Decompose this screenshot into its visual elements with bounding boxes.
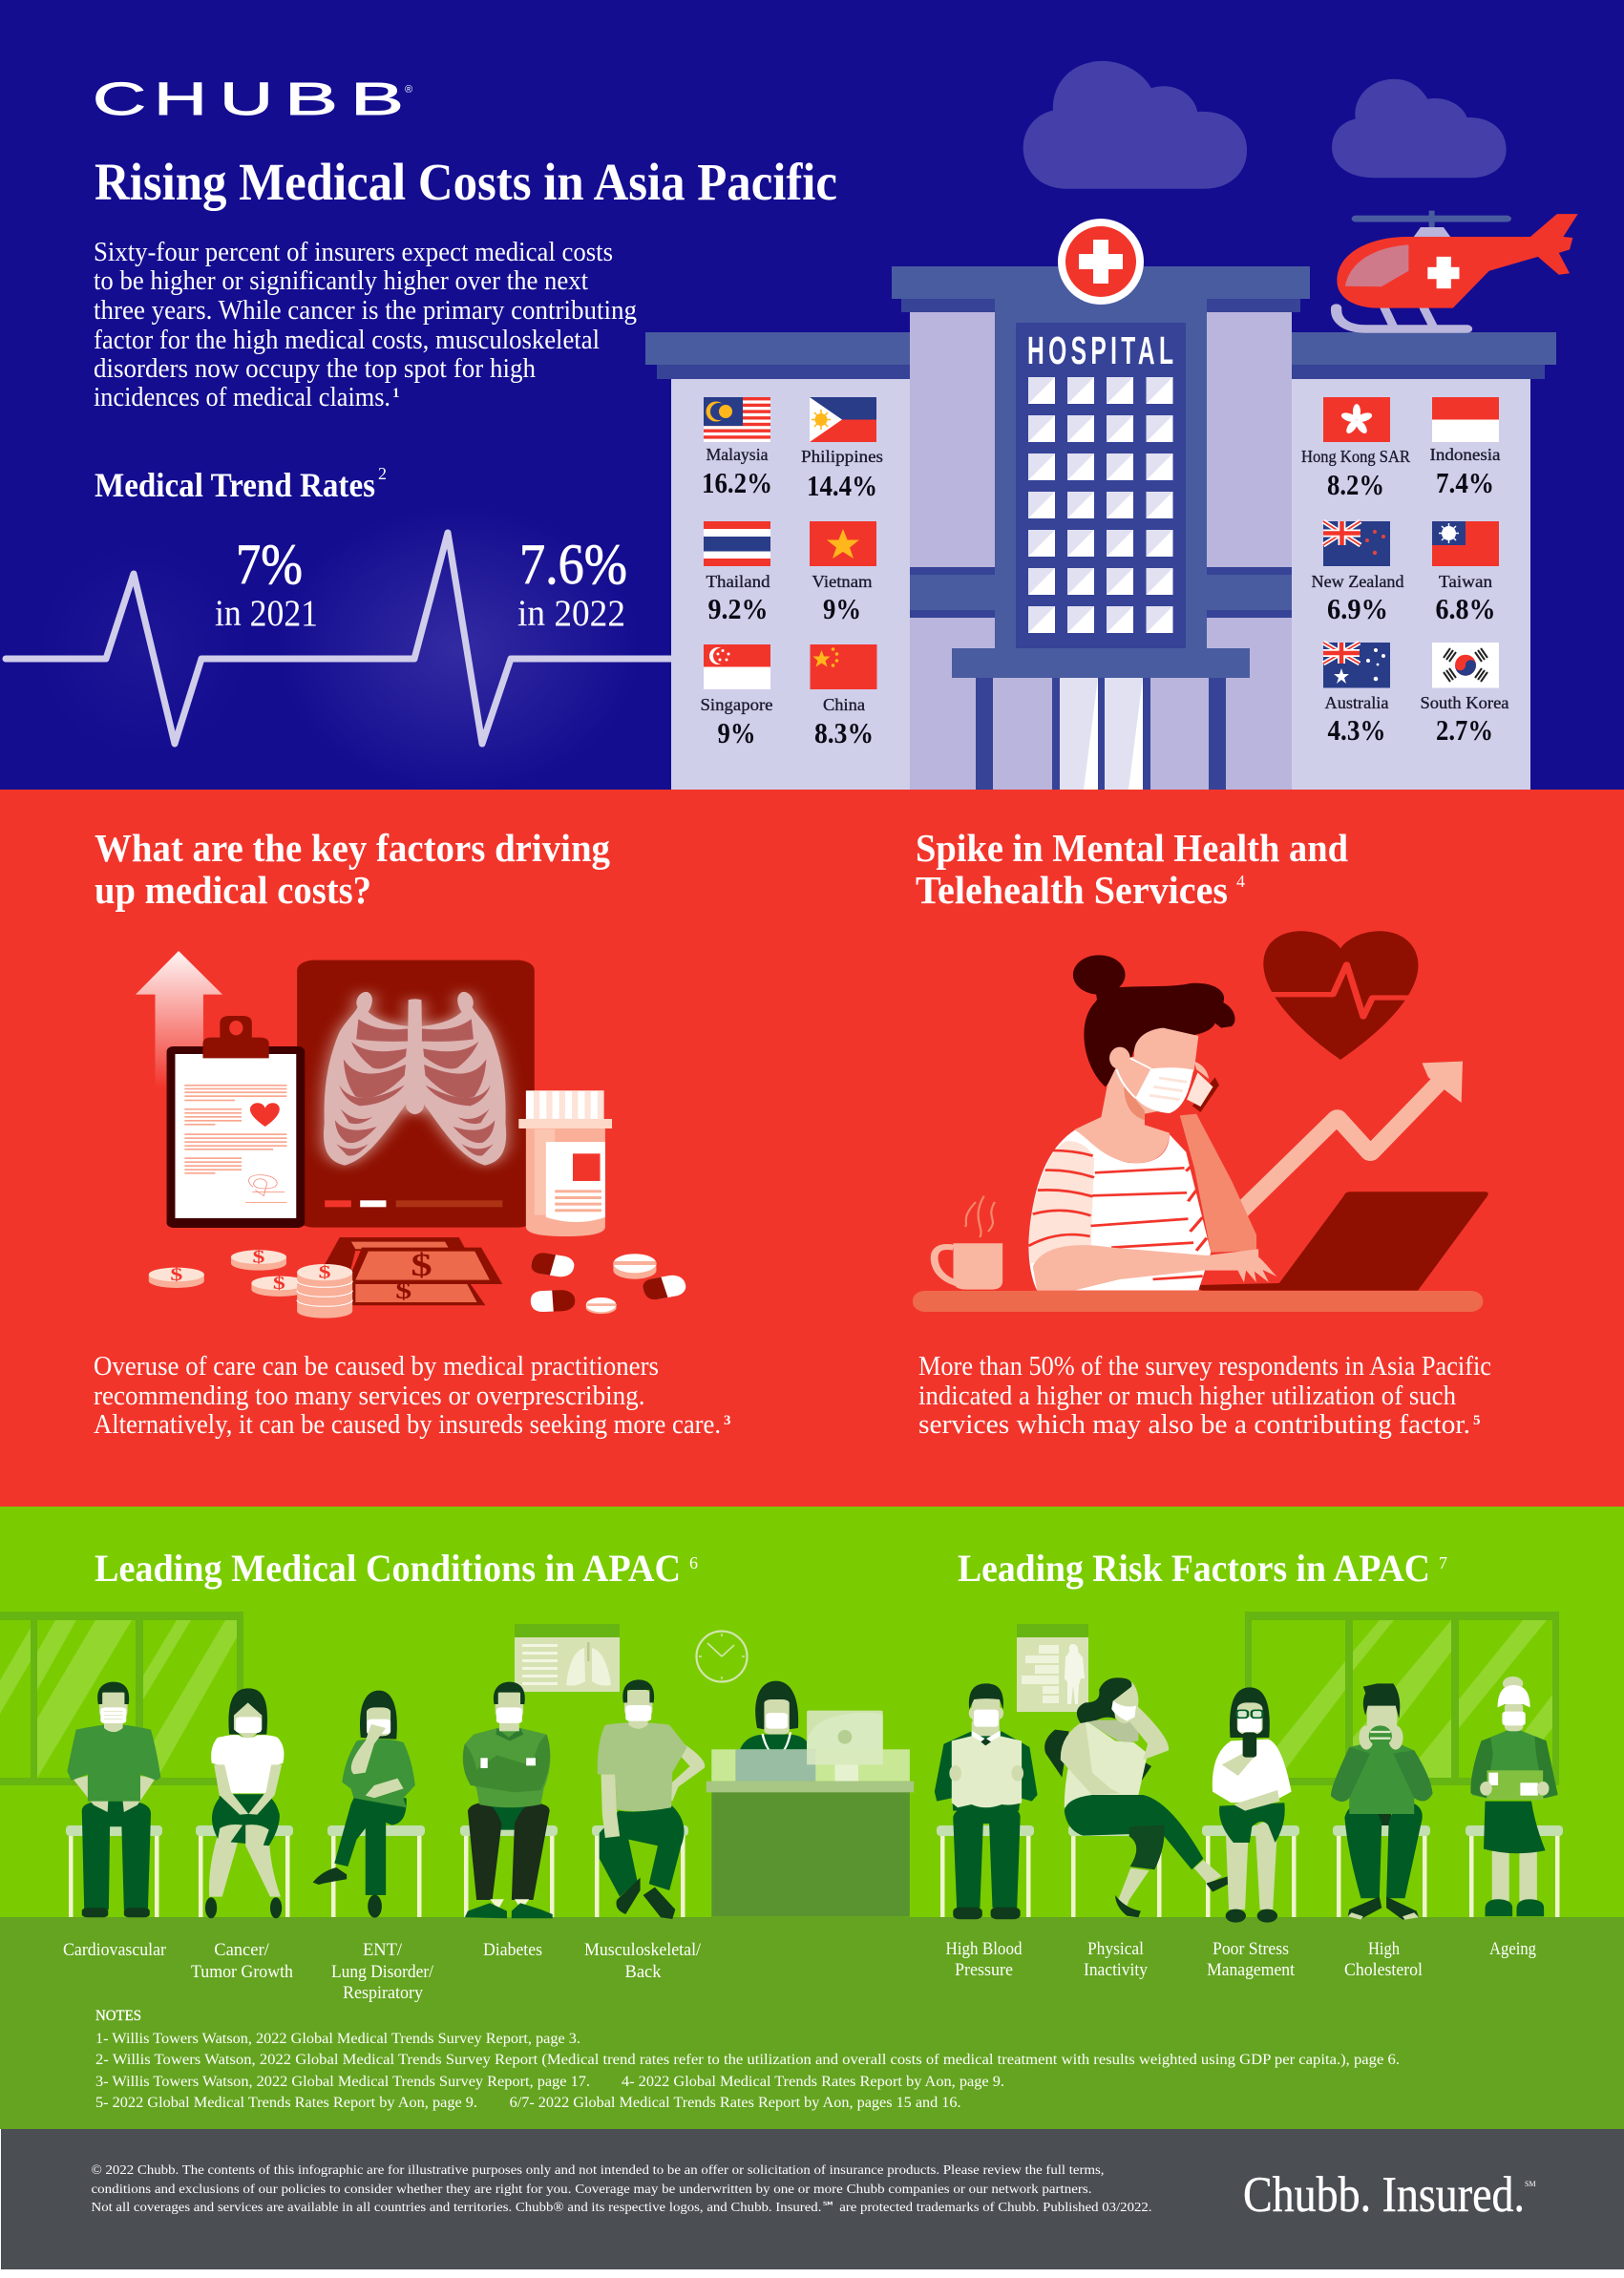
heading: key factors: up medical costs? <box>95 868 371 912</box>
right wing <box>1292 332 1556 790</box>
text: survey respondents <box>918 1352 1491 1440</box>
flag: Vietnam <box>810 521 876 566</box>
label: poor stress management <box>1207 1940 1296 1980</box>
flag: New Zealand <box>1323 521 1390 566</box>
rate: Vietnam: 9% <box>823 592 861 625</box>
pills <box>529 1252 688 1314</box>
rate: Philippines: 14.4% <box>807 469 877 502</box>
people: right group <box>935 1677 1558 1923</box>
chairs: left row <box>66 1825 688 1917</box>
rate: Indonesia <box>1430 445 1501 499</box>
legal disclaimer: © 2022 Chubb. The contents of this infographic are for illustrative purposes only and not intended to be an offer or solicitation of insurance products. Please review the full terms, <box>92 2163 1104 2178</box>
intro paragraph: to be higher or significantly higher over the next <box>94 266 588 296</box>
rate: Hong Kong SAR <box>1301 447 1410 501</box>
chairs: right row <box>937 1825 1563 1917</box>
label: poor stress management: Management <box>1207 1961 1296 1980</box>
person: musculoskeletal <box>598 1679 705 1919</box>
heading: medical trend rates: Medical Trend Rates <box>95 466 375 504</box>
label: musculoskeletal: Musculoskeletal/ <box>584 1941 702 1960</box>
illustration: woman on telehealth call <box>913 931 1488 1312</box>
label: cancer: Cancer/ <box>214 1941 270 1960</box>
heading: risk factors: Leading Risk Factors in APAC <box>958 1547 1430 1590</box>
notes: NOTES <box>95 2008 141 2024</box>
person: poor stress management <box>1213 1687 1292 1923</box>
flag: South Korea <box>1432 643 1499 687</box>
legal disclaimer <box>92 2163 1151 2215</box>
text: survey respondents: More than 50% of the survey respondents in Asia Pacific <box>918 1352 1491 1382</box>
label: ENT: Lung Disorder/ <box>331 1963 434 1982</box>
flag: China <box>810 644 876 689</box>
heading: key factors <box>95 826 610 912</box>
legal disclaimer: conditions and exclusions of our policies to consider whether they are right for you. Coverage may be underwritten by one or more Chubb companies or our network partners. <box>92 2183 1092 2197</box>
flag: Taiwan <box>1432 521 1499 566</box>
heading: key factors: What are the key factors driving <box>95 826 610 870</box>
rate: Vietnam <box>812 572 873 625</box>
tagline: Chubb Insured: SM <box>1525 2180 1536 2188</box>
woman <box>1028 955 1277 1291</box>
coins: $ <box>252 1247 264 1267</box>
label: ENT <box>331 1941 434 2003</box>
person: diabetes <box>463 1682 553 1918</box>
rate: Thailand <box>707 572 770 625</box>
logo: Chubb: H <box>154 74 207 125</box>
tagline: Chubb Insured: Chubb. Insured. <box>1243 2167 1525 2223</box>
rate: Singapore <box>701 695 773 749</box>
rate: Hong Kong SAR: Hong Kong SAR <box>1301 447 1410 466</box>
person: high blood pressure <box>935 1683 1038 1919</box>
label: cancer <box>191 1941 293 1982</box>
text: survey respondents: indicated a higher or much higher utilization of such <box>918 1382 1456 1411</box>
label: high blood pressure <box>945 1940 1023 1980</box>
floor <box>0 1917 1624 2129</box>
label: cancer: Tumor Growth <box>191 1963 293 1982</box>
label: poor stress management: Poor Stress <box>1213 1940 1289 1959</box>
rate: Indonesia: Indonesia <box>1430 445 1501 464</box>
stat: 2021 <box>215 533 318 634</box>
heading: mental health <box>916 826 1348 912</box>
notes <box>95 2008 1400 2111</box>
rate: Hong Kong SAR: 8.2% <box>1327 468 1384 501</box>
text: overuse of care: recommending too many services or overprescribing. <box>94 1382 645 1411</box>
rate: China: 8.3% <box>814 716 874 749</box>
illustration: hospital building <box>645 219 1556 790</box>
stat: 2022: in 2022 <box>517 593 625 634</box>
clipboard <box>167 1016 305 1228</box>
table <box>913 1291 1483 1312</box>
window: right <box>1245 1612 1559 1785</box>
rate: China <box>814 695 874 749</box>
poster: human body <box>1017 1624 1088 1712</box>
person: receptionist <box>740 1681 883 1782</box>
notes: 5- 2022 Global Medical Trends Rates Report by Aon, page 9. <box>95 2095 477 2111</box>
label: high blood pressure: Pressure <box>955 1961 1013 1980</box>
stat: 2021: in 2021 <box>215 593 318 634</box>
icon: heart with pulse <box>1262 931 1418 1060</box>
intro paragraph <box>94 238 637 412</box>
left wing <box>645 332 910 790</box>
poster: lungs <box>515 1624 620 1692</box>
flag: Hong Kong SAR <box>1323 397 1390 442</box>
person: ENT <box>313 1691 415 1918</box>
country rates <box>701 445 1509 749</box>
central block <box>892 266 1310 790</box>
rate: South Korea: 2.7% <box>1436 713 1493 747</box>
heading: mental health: 4 <box>1236 872 1245 891</box>
logo: Chubb <box>93 74 412 125</box>
flag: Indonesia <box>1432 397 1499 442</box>
label: high cholesterol <box>1344 1940 1423 1980</box>
panel: green section <box>0 1507 1624 2129</box>
labels: risk factors <box>945 1940 1536 1980</box>
notes: 6/7- 2022 Global Medical Trends Rates Report by Aon, pages 15 and 16. <box>510 2095 961 2111</box>
illustration: medical costs <box>136 951 688 1318</box>
label: diabetes: Diabetes <box>483 1941 542 1960</box>
person: cancer <box>205 1688 284 1918</box>
person: cardiovascular <box>67 1682 160 1917</box>
logo: Chubb: B <box>350 74 404 125</box>
pill bottle <box>518 1090 612 1236</box>
label: ENT: ENT/ <box>363 1941 403 1960</box>
panel: red section <box>0 790 1624 1507</box>
rate: Malaysia <box>702 445 772 499</box>
rate: Philippines: Philippines <box>801 447 883 466</box>
rate: Malaysia: 16.2% <box>702 466 772 499</box>
label: cardiovascular: Cardiovascular <box>63 1941 166 1960</box>
rate: New Zealand <box>1312 572 1403 625</box>
money bills: $ <box>411 1247 432 1283</box>
rate: New Zealand: 6.9% <box>1327 592 1388 625</box>
label: high cholesterol: High <box>1368 1940 1400 1959</box>
intro paragraph: factor for the high medical costs, musculoskeletal <box>94 326 600 355</box>
text: survey respondents: 5 <box>1473 1413 1480 1428</box>
label: musculoskeletal: Back <box>624 1963 662 1982</box>
rate: Australia: Australia <box>1325 693 1389 712</box>
stat: 2022 <box>517 533 627 634</box>
rate: South Korea: South Korea <box>1421 693 1509 712</box>
logo: Chubb: U <box>220 74 273 125</box>
notes: 3- Willis Towers Watson, 2022 Global Medical Trends Survey Report, page 17. <box>95 2074 590 2090</box>
person: high cholesterol <box>1331 1683 1433 1920</box>
text: overuse of care: Alternatively, it can be caused by insureds seeking more care. <box>94 1410 721 1440</box>
text: overuse of care: Overuse of care can be caused by medical practitioners <box>94 1352 659 1382</box>
heading: medical trend rates: 2 <box>378 464 387 483</box>
text: survey respondents: services which may also be a contributing factor. <box>918 1410 1470 1440</box>
rate: Singapore: 9% <box>718 716 756 749</box>
coins: $ <box>273 1273 285 1293</box>
icon: clock <box>697 1631 747 1682</box>
heading: risk factors: 7 <box>1439 1553 1447 1572</box>
coins: $ <box>319 1262 331 1282</box>
icon: helicopter <box>1337 211 1578 328</box>
title: Rising Medical Costs in Asia Pacific <box>95 153 837 211</box>
label: ageing: Ageing <box>1489 1940 1536 1959</box>
label: high blood pressure: High Blood <box>945 1940 1023 1959</box>
flag: Thailand <box>704 521 770 566</box>
heading: mental health: Spike in Mental Health and <box>916 826 1348 870</box>
intro paragraph: 1 <box>392 386 399 401</box>
heading: medical conditions: Leading Medical Conditions in APAC <box>95 1547 681 1590</box>
window: left <box>0 1612 243 1785</box>
intro paragraph: three years. While cancer is the primary contributing <box>94 296 637 326</box>
logo: Chubb: C <box>93 74 146 125</box>
rate: Malaysia: Malaysia <box>707 445 769 464</box>
intro paragraph: incidences of medical claims. <box>94 383 390 412</box>
text: overuse of care <box>94 1352 731 1440</box>
chart: heartbeat line <box>6 533 678 744</box>
windows <box>1028 377 1172 633</box>
heading: medical conditions: 6 <box>689 1553 698 1572</box>
entrance <box>952 648 1250 790</box>
rate: Taiwan: Taiwan <box>1439 572 1492 591</box>
rate: Philippines <box>801 447 883 502</box>
rate: China: China <box>823 695 865 714</box>
laptop <box>1198 1192 1488 1291</box>
rate: Australia: 4.3% <box>1327 713 1386 747</box>
x-ray <box>297 960 535 1228</box>
stat: 2021: 7% <box>236 533 303 596</box>
rate: Thailand: Thailand <box>707 572 770 591</box>
panel: blue header <box>0 0 1624 792</box>
rate: Vietnam: Vietnam <box>812 572 873 591</box>
heading: mental health: Telehealth Services <box>916 868 1228 912</box>
label: physical inactivity: Physical <box>1087 1940 1144 1959</box>
people: left group <box>67 1679 914 1919</box>
person: physical inactivity <box>1044 1677 1235 1917</box>
coins: $ <box>170 1264 182 1284</box>
rate: Thailand: 9.2% <box>708 592 768 625</box>
notes: 2- Willis Towers Watson, 2022 Global Medical Trends Survey Report (Medical trend rates refer to the utilization and overall costs of medical treatment with results weighted using GDP per capita.), page 6. <box>95 2052 1400 2068</box>
icon: medical cross badge <box>1058 219 1144 305</box>
flag: Singapore <box>704 644 770 689</box>
flag: Malaysia <box>704 397 770 442</box>
intro paragraph: Sixty-four percent of insurers expect medical costs <box>94 238 613 267</box>
labels: medical conditions <box>63 1941 702 2003</box>
label: ENT: Respiratory <box>343 1984 424 2003</box>
panel: footer <box>1 2129 1624 2269</box>
rate: Taiwan: 6.8% <box>1436 592 1495 625</box>
sign: hospital: HOSPITAL <box>1027 329 1173 373</box>
icon: up arrow <box>136 951 222 1088</box>
coffee cup <box>935 1196 1002 1290</box>
flag: Philippines <box>810 397 876 442</box>
money bills: $ <box>395 1277 411 1304</box>
logo: Chubb: B <box>285 74 338 125</box>
label: physical inactivity: Inactivity <box>1084 1961 1149 1980</box>
text: overuse of care: 3 <box>724 1413 731 1428</box>
label: physical inactivity <box>1084 1940 1149 1980</box>
stat: 2022: 7.6% <box>519 533 627 596</box>
logo: Chubb: ® <box>405 84 412 95</box>
rate: Singapore: Singapore <box>701 695 773 714</box>
icon: clouds <box>1023 61 1507 189</box>
rate: New Zealand: New Zealand <box>1312 572 1403 591</box>
legal disclaimer: Not all coverages and services are available in all countries and territories. Chubb® and its respective logos, and Chubb. Insured.℠ are protected trademarks of Chubb. Published 03/2022. <box>92 2201 1151 2215</box>
desk <box>707 1749 914 1917</box>
intro paragraph: disorders now occupy the top spot for high <box>94 354 536 384</box>
label: musculoskeletal <box>584 1941 702 1982</box>
person: ageing <box>1470 1677 1558 1916</box>
rate: Taiwan <box>1436 572 1495 625</box>
flag: Australia <box>1323 643 1390 687</box>
money bills <box>324 1237 502 1305</box>
notes: 4- 2022 Global Medical Trends Rates Report by Aon, page 9. <box>622 2074 1004 2090</box>
notes: 1- Willis Towers Watson, 2022 Global Medical Trends Survey Report, page 3. <box>95 2031 580 2047</box>
rate: South Korea <box>1421 693 1509 747</box>
label: high cholesterol: Cholesterol <box>1344 1961 1423 1980</box>
rate: Indonesia: 7.4% <box>1436 466 1494 499</box>
chart glow <box>38 506 640 792</box>
rate: Australia <box>1325 693 1389 747</box>
arrow: upward trend <box>1237 1072 1449 1214</box>
coins <box>149 1247 352 1318</box>
